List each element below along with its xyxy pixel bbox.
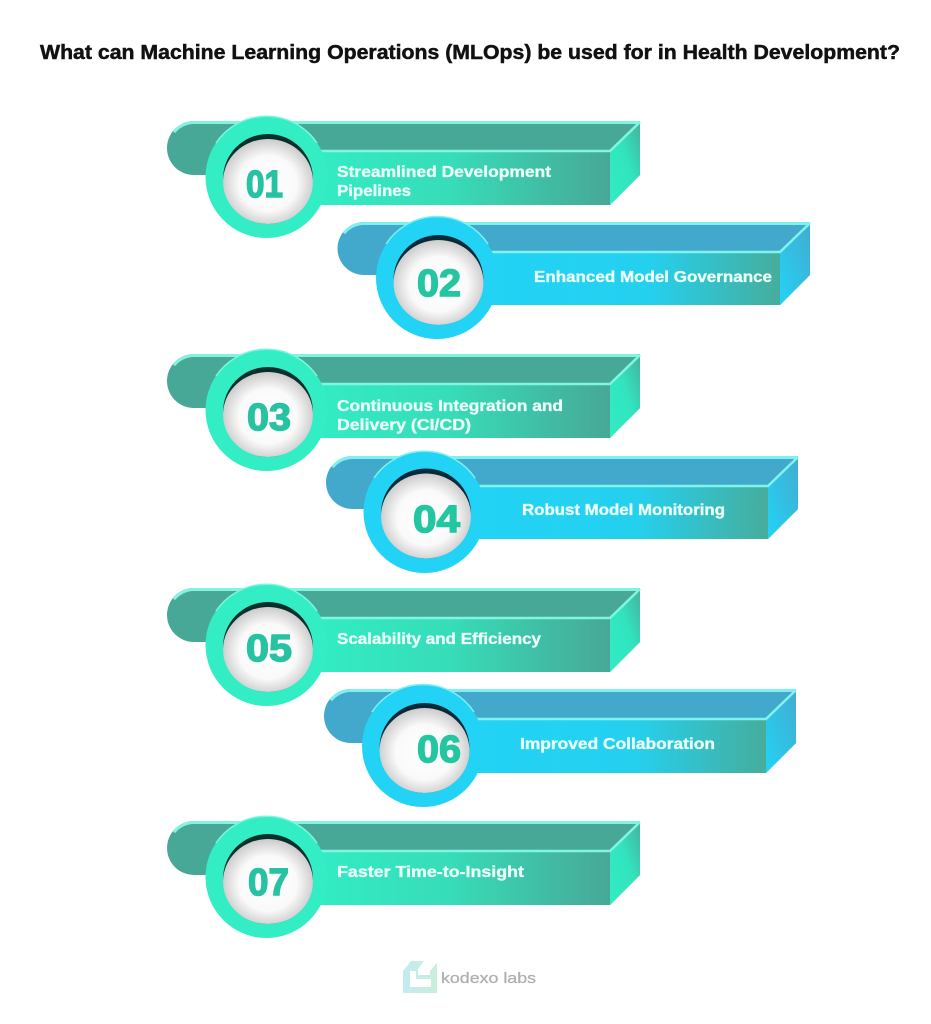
label: Robust Model Monitoring: [522, 502, 725, 519]
item 01: Streamlined Development Pipelines: [167, 116, 640, 238]
label: Scalability and Efficiency: [337, 631, 541, 648]
item 07: Faster Time-to-Insight: [167, 816, 640, 938]
label: Streamlined Development: [337, 164, 551, 181]
item 05: Scalability and Efficiency: [167, 584, 640, 706]
item 06: Improved Collaboration: [324, 684, 796, 807]
item 02: Enhanced Model Governance: [338, 216, 810, 339]
number 05: 05: [246, 628, 292, 670]
item 03: Continuous Integration and Delivery (CI/CD): [167, 349, 640, 471]
item 04: Robust Model Monitoring: [326, 451, 798, 573]
logo wordmark: kodexo labs: [441, 970, 536, 987]
title: What can Machine Learning Operations (MLOps) be used for in Health Development?: [40, 41, 900, 64]
number 02: 02: [417, 263, 461, 305]
logo: kodexo labs: [403, 961, 536, 993]
number 03: 03: [247, 397, 291, 439]
number 01: 01: [246, 164, 283, 206]
icon: logo mark: [403, 961, 437, 993]
label: Faster Time-to-Insight: [337, 864, 524, 881]
number 04: 04: [413, 499, 460, 541]
item 03: Continuous Integration and Delivery (CI/CD): Delivery (CI/CD): [337, 417, 471, 434]
label: Improved Collaboration: [520, 736, 715, 753]
label: Continuous Integration and: [337, 398, 563, 415]
label: Enhanced Model Governance: [534, 269, 772, 286]
number 06: 06: [417, 729, 461, 771]
item 01: Streamlined Development Pipelines: Pipelines: [337, 183, 411, 200]
number 07: 07: [248, 862, 289, 904]
